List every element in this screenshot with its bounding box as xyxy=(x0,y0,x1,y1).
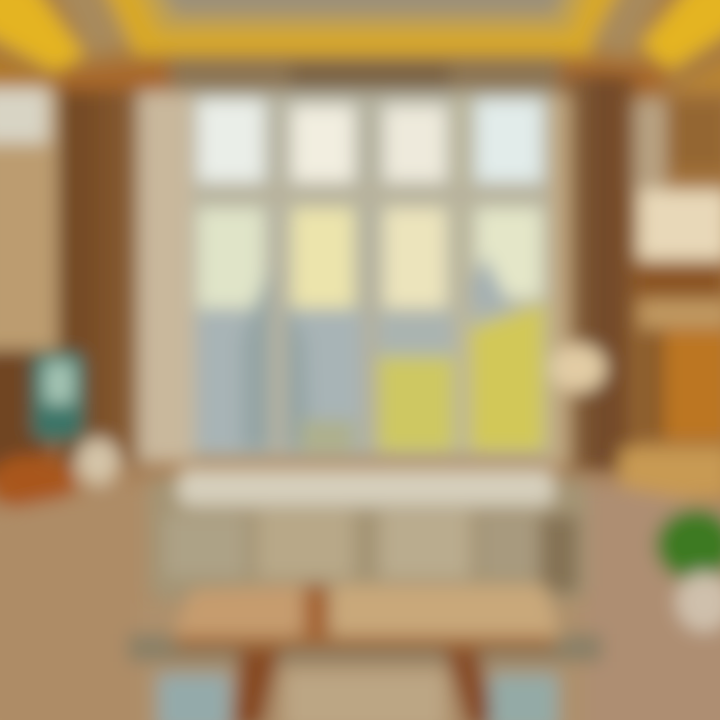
rug patches xyxy=(158,672,558,720)
monitor xyxy=(32,352,84,440)
side table xyxy=(0,438,120,509)
window panes middle row xyxy=(198,208,542,308)
left cream curtain xyxy=(138,92,192,462)
table legs xyxy=(232,650,280,720)
sofa back cushions xyxy=(178,468,554,506)
lamp right of window xyxy=(550,344,606,392)
yellow buildings xyxy=(366,302,545,452)
ceiling xyxy=(0,0,720,125)
right cream curtain xyxy=(546,95,570,465)
right brown curtain xyxy=(564,75,636,470)
right wall and shelves xyxy=(620,90,720,498)
left brown curtain xyxy=(58,90,156,465)
window panes top row xyxy=(198,100,542,182)
coffee table xyxy=(128,585,602,720)
left wall xyxy=(0,88,60,480)
window muntins xyxy=(195,95,545,455)
curtain valance xyxy=(170,58,560,94)
skyline lower panes xyxy=(198,255,546,452)
plant xyxy=(656,509,720,632)
sofa seat cushions xyxy=(165,510,538,578)
window xyxy=(192,92,550,458)
floor xyxy=(0,480,720,720)
sofa xyxy=(148,468,588,600)
